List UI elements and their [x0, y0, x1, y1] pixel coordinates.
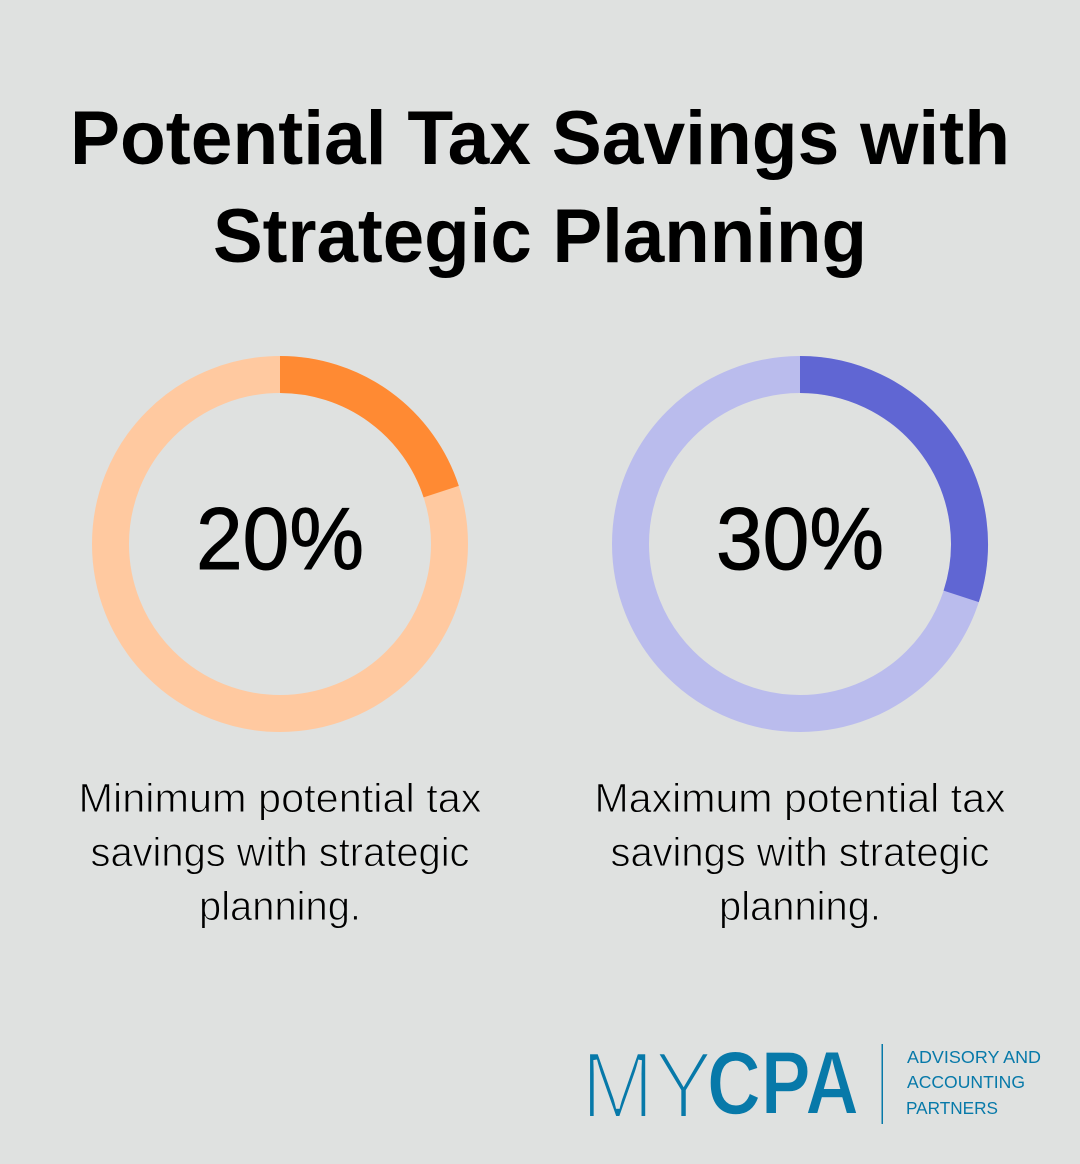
- description: minimum: Minimum potential tax: [78, 775, 482, 821]
- description: maximum: [594, 775, 1006, 929]
- title: Strategic Planning: [213, 194, 867, 279]
- panel: minimum savings: [78, 374, 482, 929]
- description: maximum: savings with strategic: [610, 829, 990, 875]
- panel: maximum savings: [594, 374, 1006, 929]
- logo tagline: ADVISORY AND: [907, 1047, 1041, 1067]
- donut chart: 30%: [630, 374, 970, 714]
- logo tagline: ACCOUNTING: [907, 1072, 1025, 1092]
- title: [70, 96, 1010, 279]
- title: Potential Tax Savings with: [70, 96, 1010, 181]
- logo: MYCPA: [581, 1032, 1041, 1139]
- logo tagline: [906, 1047, 1041, 1118]
- value: 20%: 20%: [196, 489, 364, 588]
- logo wordmark: CPA: [707, 1034, 859, 1134]
- description: maximum: Maximum potential tax: [594, 775, 1006, 821]
- logo wordmark: [581, 1032, 859, 1139]
- description: minimum: savings with strategic: [90, 829, 470, 875]
- description: minimum: [78, 775, 482, 929]
- value: 30%: 30%: [716, 489, 884, 588]
- description: maximum: planning.: [719, 883, 881, 929]
- logo wordmark: MY: [581, 1032, 713, 1139]
- description: minimum: planning.: [199, 883, 361, 929]
- logo tagline: PARTNERS: [906, 1098, 998, 1118]
- donut chart: 20%: [110, 374, 450, 714]
